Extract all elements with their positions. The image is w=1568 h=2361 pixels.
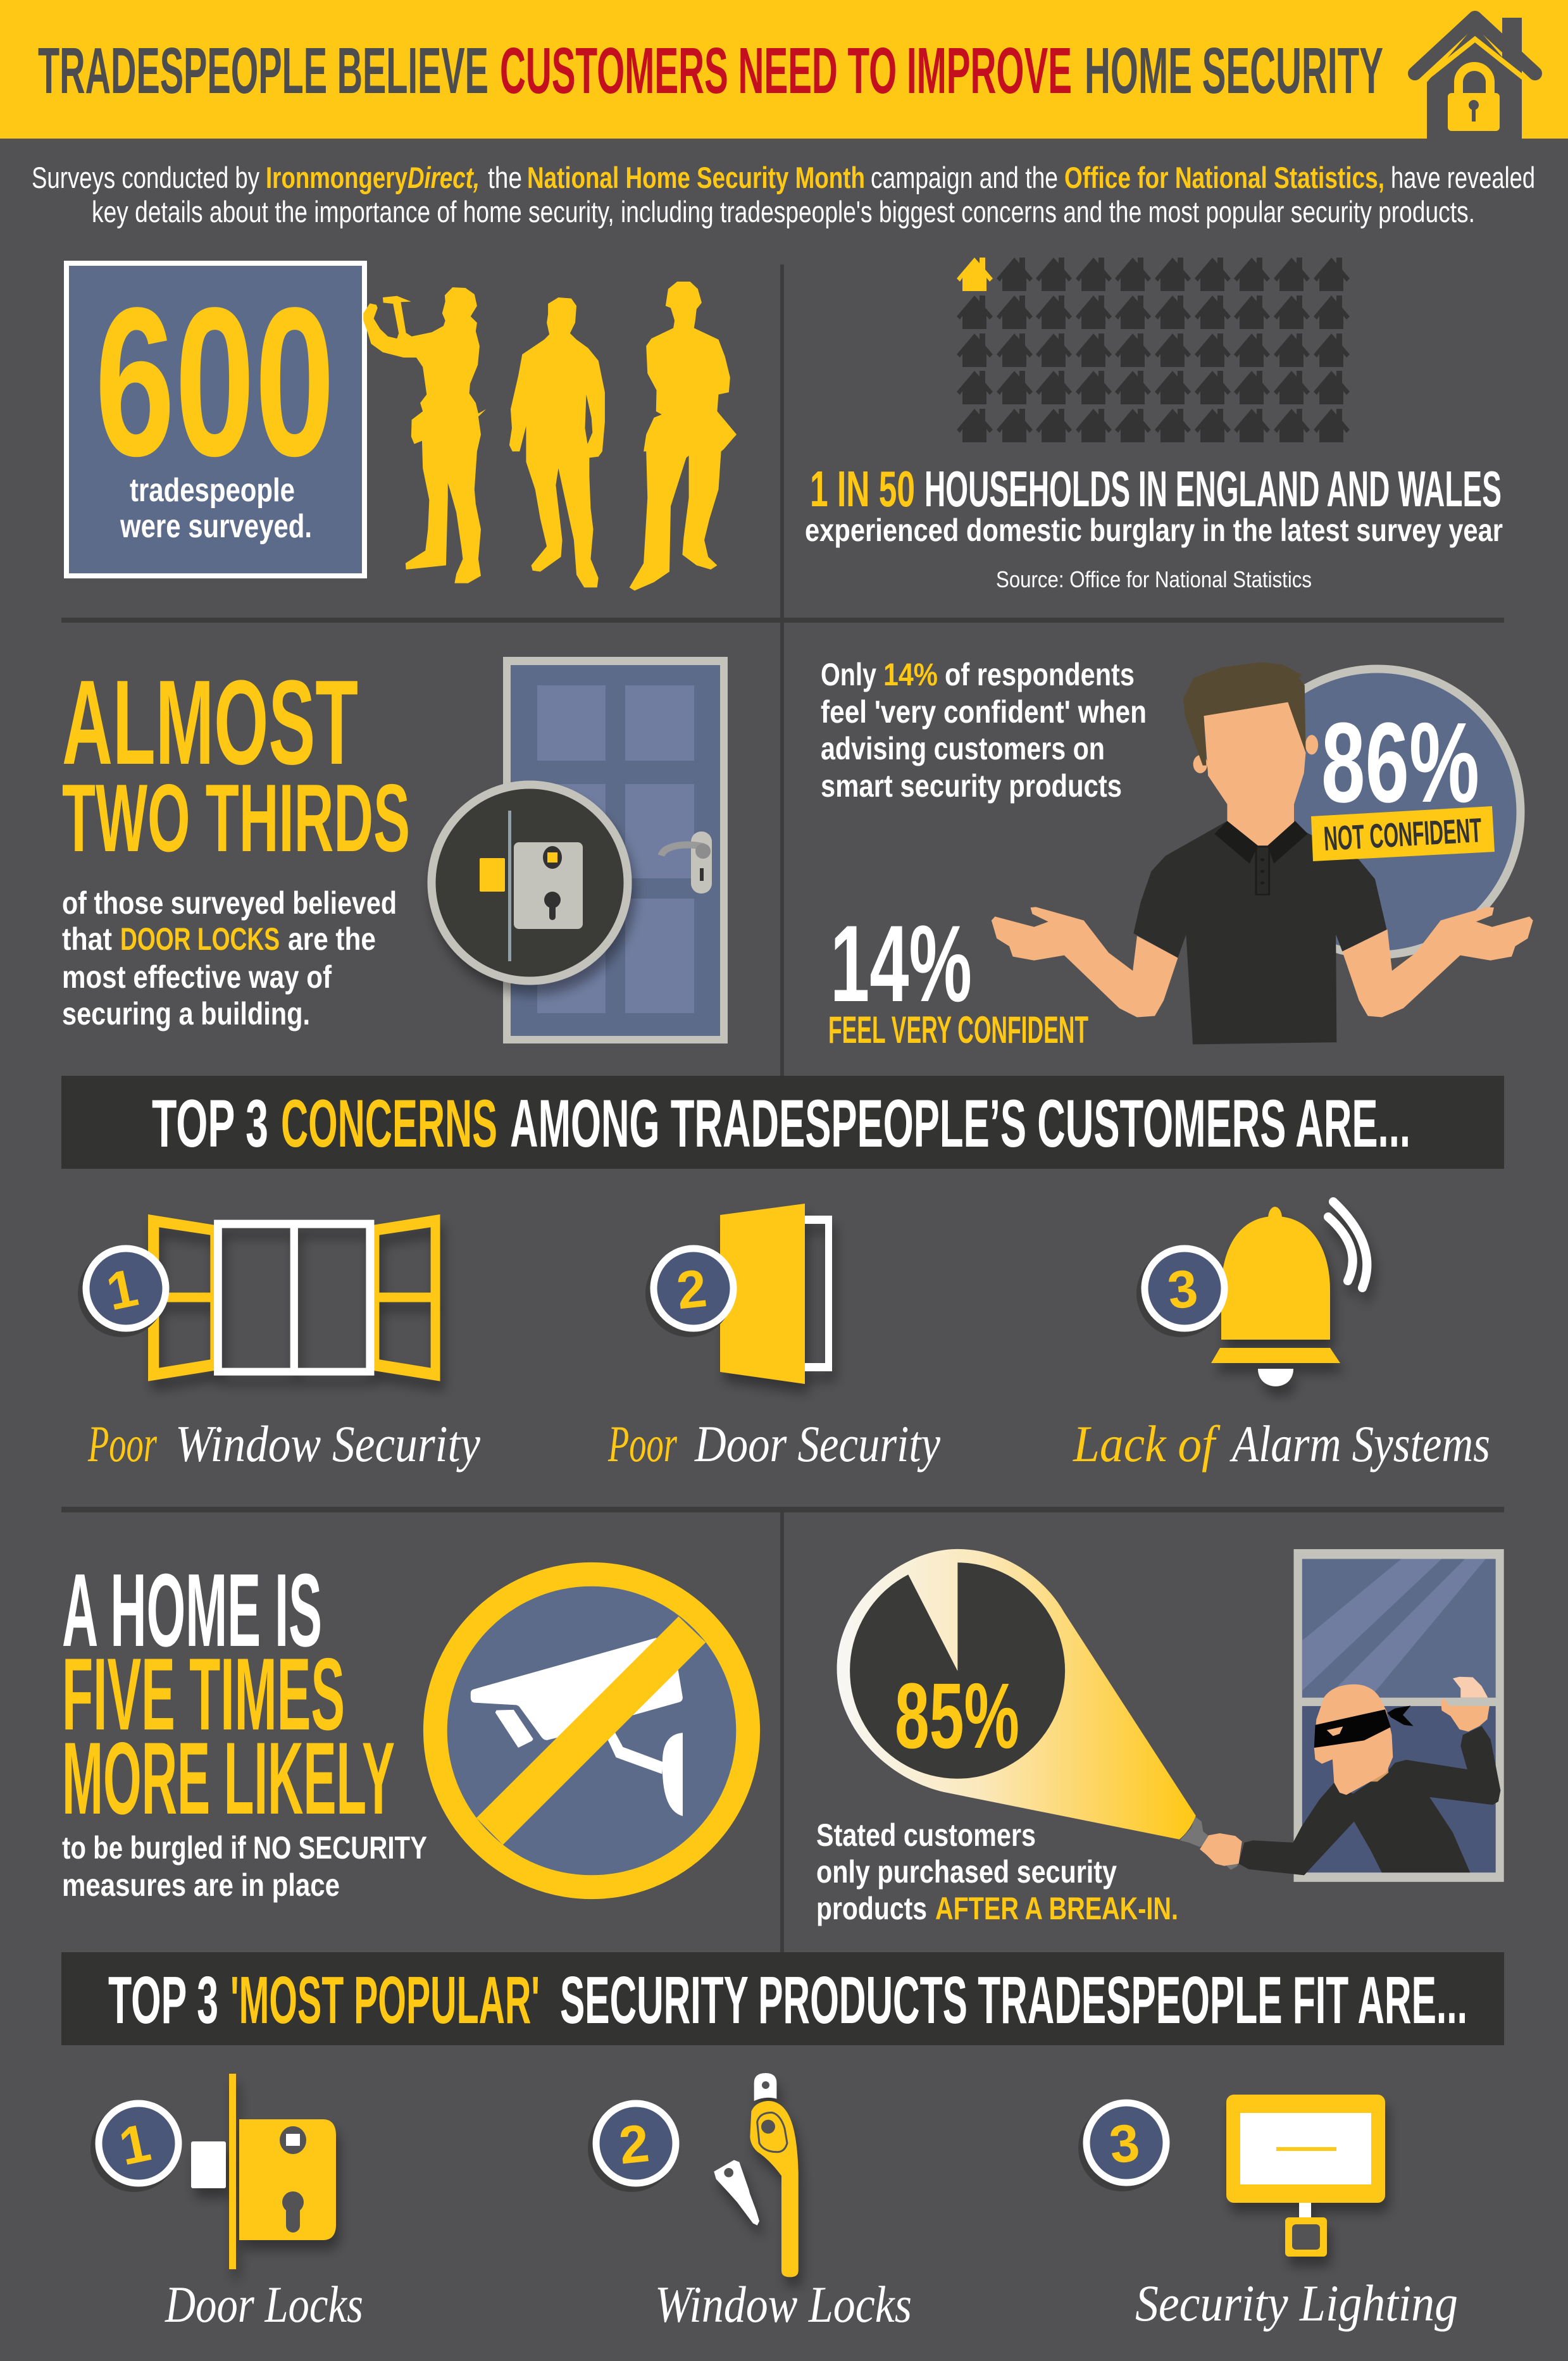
- break-in text: [816, 1817, 1178, 1926]
- heading: A HOME IS: [62, 1552, 322, 1668]
- respondents text: Only: [821, 657, 876, 692]
- respondents text: 14%: [883, 657, 938, 692]
- number badge 3: [1136, 1249, 1224, 1337]
- panel: five times more likely: [62, 1552, 748, 1903]
- stat box: [66, 263, 364, 576]
- label: Window Locks: [655, 2276, 912, 2333]
- spotlight beam and 85% pie: [837, 1549, 1196, 1840]
- door locks text: securing a building.: [62, 996, 310, 1031]
- label: [607, 1415, 941, 1473]
- product 3: security lighting: [1078, 2095, 1458, 2332]
- intro text: National Home Security Month: [527, 161, 865, 194]
- title: CUSTOMERS NEED TO IMPROVE: [500, 34, 1072, 107]
- heading: almost two thirds: ALMOST: [62, 656, 358, 790]
- no security text: to be burgled if NO SECURITY: [62, 1830, 427, 1866]
- label: [1073, 1415, 1490, 1473]
- label: [87, 1415, 481, 1473]
- intro text: [32, 161, 1535, 228]
- break-in text: AFTER A BREAK-IN.: [935, 1891, 1178, 1926]
- product 1: door locks: [90, 2074, 363, 2333]
- icon: security light: [1226, 2095, 1385, 2257]
- heading: FIVE TIMES: [62, 1637, 345, 1752]
- source note: Source: Office for National Statistics: [996, 566, 1312, 592]
- heading: [62, 1552, 395, 1836]
- label: Poor: [87, 1415, 158, 1473]
- header banner: [0, 0, 1568, 139]
- no security text: measures are in place: [62, 1867, 340, 1903]
- banner: top 3 most popular products: 'MOST POPULAR': [230, 1963, 540, 2038]
- panel: five times more likely: MORE LIKELY: [62, 1721, 395, 1836]
- label: Window Security: [175, 1415, 481, 1473]
- intro text: Office for National Statistics,: [1064, 161, 1384, 194]
- concern 1: poor window security: [78, 1214, 481, 1473]
- stat box: 600: [95, 263, 335, 500]
- icon: mortice lock callout: [432, 785, 628, 981]
- title: [38, 34, 1383, 107]
- panel: 85% after a break-in: [816, 1549, 1504, 1926]
- number badge 3: 3: [1165, 1258, 1200, 1320]
- heading: almost two thirds: TWO THIRDS: [62, 764, 410, 872]
- respondents text: smart security products: [821, 768, 1122, 804]
- panel: 600 tradespeople: [66, 263, 737, 590]
- label: Door Security: [694, 1415, 941, 1473]
- banner: top 3 concerns: TOP 3: [152, 1085, 268, 1161]
- intro text: IronmongeryDirect,: [266, 161, 480, 194]
- concern 2: poor door security: [607, 1204, 941, 1473]
- panel: 14% very confident: [821, 657, 1533, 1051]
- label: Door Locks: [165, 2276, 363, 2333]
- number badge 1: 1: [101, 1257, 143, 1321]
- break-in text: Stated customers: [816, 1817, 1036, 1853]
- number badge 1: 1: [114, 2112, 156, 2176]
- panel: almost two thirds: [62, 656, 728, 1043]
- icon: door: [503, 657, 728, 1043]
- icon: tradespeople silhouettes: [363, 282, 737, 590]
- number badge 3: [1078, 2103, 1166, 2191]
- intro text: the: [488, 161, 522, 194]
- concern 3: lack of alarm systems: [1073, 1202, 1490, 1473]
- intro text: campaign and the: [871, 161, 1058, 194]
- 86% not confident circle: [1235, 669, 1521, 955]
- banner: top 3 most popular products: TOP 3: [108, 1963, 218, 2038]
- icon: open window: [148, 1214, 440, 1381]
- door locks text: that: [62, 921, 112, 957]
- stat: 85%: 85%: [895, 1664, 1019, 1768]
- heading: almost two thirds: [62, 656, 410, 872]
- banner: top 3 concerns: CONCERNS: [281, 1085, 497, 1161]
- number badge 2: [645, 1249, 733, 1337]
- icon: alarm bell: [1211, 1202, 1367, 1386]
- intro text: Surveys conducted by: [32, 161, 259, 194]
- icon: window with burglar: [1180, 1549, 1504, 1882]
- door locks text: are the: [288, 921, 376, 957]
- break-in text: products: [816, 1891, 927, 1926]
- respondents text: advising customers on: [821, 731, 1105, 766]
- icon: shrugging man: [992, 662, 1533, 1044]
- title: TRADESPEOPLE BELIEVE: [38, 34, 488, 107]
- respondents text: of respondents: [945, 657, 1135, 692]
- icon: door lock: [191, 2074, 336, 2269]
- icon: open door: [720, 1204, 832, 1384]
- icon: window handle and key: [714, 2073, 799, 2277]
- break-in text: only purchased security: [816, 1854, 1117, 1890]
- door locks text: DOOR LOCKS: [120, 921, 280, 957]
- label: Alarm Systems: [1229, 1415, 1490, 1473]
- number badge 1: [90, 2103, 178, 2192]
- door locks text: most effective way of: [62, 959, 332, 995]
- banner: top 3 most popular products: [61, 1952, 1504, 2045]
- icon: flashlight beam and pie chart: [837, 1549, 1196, 1840]
- icon: grid of 50 houses: [957, 258, 1350, 442]
- respondents text: feel 'very confident' when: [821, 694, 1147, 730]
- number badge 3: 3: [1107, 2112, 1142, 2174]
- banner: top 3 concerns: [61, 1076, 1504, 1169]
- respondents text: [821, 657, 1147, 804]
- panel: 1 in 50 households: [805, 258, 1503, 592]
- number badge 2: [588, 2103, 676, 2192]
- label: Security Lighting: [1135, 2274, 1458, 2332]
- stat: 86%: 86%: [1321, 699, 1479, 826]
- icon: house with padlock: [1415, 18, 1535, 139]
- door locks text: [62, 885, 397, 1031]
- headline: 1 in 50 households: 1 IN 50: [810, 461, 915, 517]
- label: Lack of: [1073, 1415, 1221, 1473]
- number badge 1: [78, 1249, 166, 1337]
- label: Poor: [607, 1415, 678, 1473]
- product 2: window locks: [588, 2073, 912, 2333]
- section dividers: [61, 265, 1504, 1952]
- no security text: [62, 1830, 427, 1903]
- door locks text: of those surveyed believed: [62, 885, 397, 921]
- feel very confident label: FEEL VERY CONFIDENT: [828, 1009, 1088, 1051]
- stat: 14%: 14%: [830, 903, 972, 1025]
- not confident tag: [1311, 806, 1495, 861]
- icon: crossed-out security camera: [435, 1574, 748, 1887]
- number badge 2: 2: [616, 2113, 652, 2175]
- stat box: were surveyed.: [120, 508, 312, 545]
- number badge 2: 2: [674, 1258, 709, 1320]
- stat box: tradespeople: [130, 472, 295, 509]
